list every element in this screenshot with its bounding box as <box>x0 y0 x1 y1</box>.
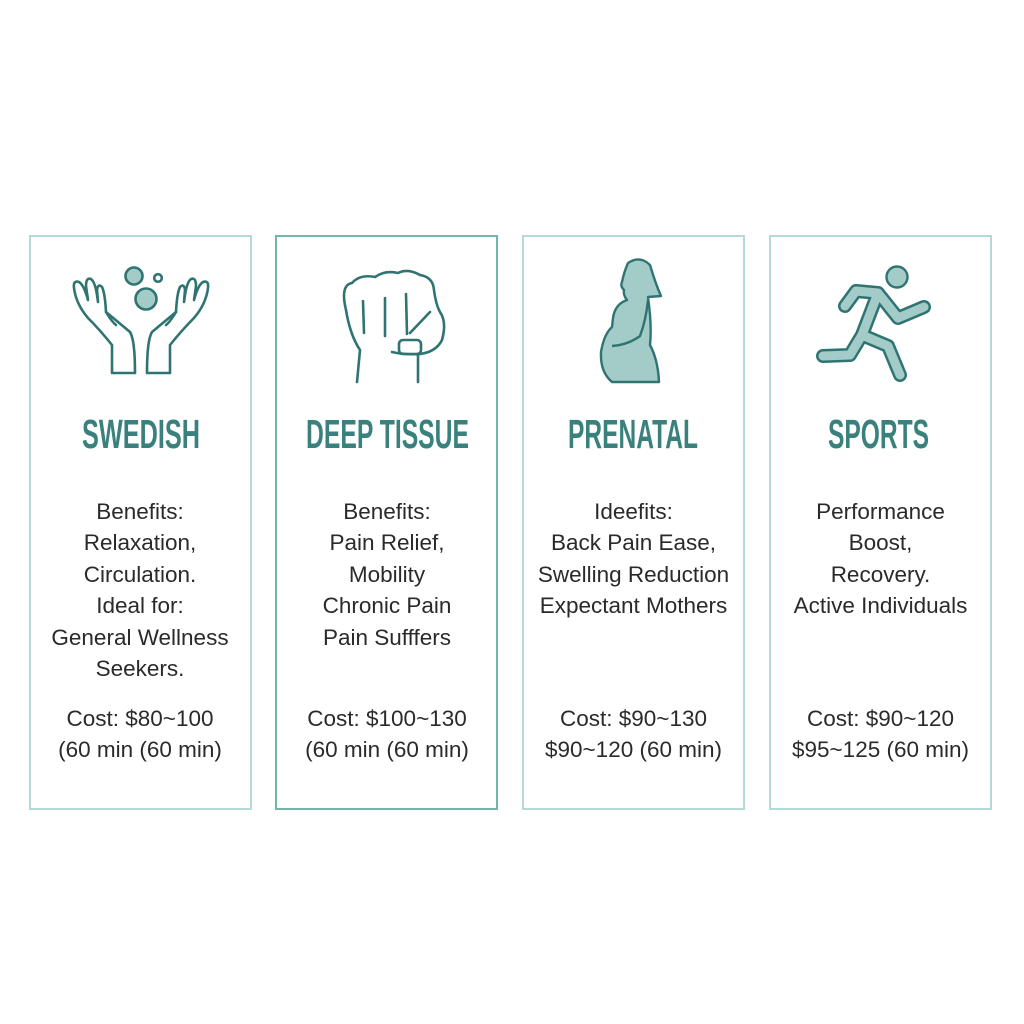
text: prenatal cost: Cost: $90~130 <box>560 706 707 731</box>
text: sports cost <box>792 706 969 762</box>
title: prenatal: PRENATAL <box>568 411 698 457</box>
text: sports benefits: Recovery. <box>831 562 930 587</box>
text: sports benefits: Active Individuals <box>794 593 967 618</box>
text: swedish cost: Cost: $80~100 <box>66 706 214 731</box>
text: prenatal benefits: Swelling Reduction <box>538 562 729 587</box>
text: deep tissue cost <box>305 706 469 762</box>
panel: prenatal <box>522 235 745 810</box>
text: swedish benefits: Benefits: <box>96 499 184 524</box>
icon: runner <box>823 266 924 375</box>
icon: fist <box>344 271 444 382</box>
title: sports: SPORTS <box>828 411 929 457</box>
text: prenatal benefits: Expectant Mothers <box>540 593 727 618</box>
text: deep tissue benefits: Mobility <box>349 562 425 587</box>
text: swedish cost <box>58 706 222 762</box>
text: sports cost: $95~125 (60 min) <box>792 737 969 762</box>
text: sports benefits: Boost, <box>849 530 912 555</box>
panel: sports <box>769 235 992 810</box>
panel: swedish <box>29 235 252 810</box>
icon: pregnant woman <box>601 259 661 382</box>
title: deep tissue: DEEP TISSUE <box>306 411 469 457</box>
text: swedish benefits <box>51 499 229 681</box>
text: sports benefits: Performance <box>816 499 945 524</box>
text: swedish benefits: General Wellness <box>51 625 229 650</box>
text: sports cost: Cost: $90~120 <box>807 706 954 731</box>
text: swedish benefits: Ideal for: <box>96 593 184 618</box>
text: swedish cost: (60 min (60 min) <box>58 737 222 762</box>
text: deep tissue benefits: Benefits: <box>343 499 431 524</box>
text: deep tissue benefits: Pain Sufffers <box>323 625 451 650</box>
icon: hands with bubbles <box>74 268 208 373</box>
text: prenatal benefits: Back Pain Ease, <box>551 530 716 555</box>
text: swedish benefits: Seekers. <box>96 656 184 681</box>
text: prenatal cost <box>545 706 722 762</box>
text: deep tissue cost: Cost: $100~130 <box>307 706 467 731</box>
text: swedish benefits: Relaxation, <box>84 530 196 555</box>
text: deep tissue benefits: Pain Relief, <box>329 530 445 555</box>
text: sports benefits <box>794 499 967 618</box>
text: deep tissue cost: (60 min (60 min) <box>305 737 469 762</box>
panel: deep tissue <box>275 235 498 810</box>
text: deep tissue benefits: Chronic Pain <box>323 593 451 618</box>
title: swedish: SWEDISH <box>82 411 200 457</box>
text: swedish benefits: Circulation. <box>84 562 196 587</box>
text: prenatal benefits <box>538 499 729 618</box>
text: deep tissue benefits <box>323 499 451 650</box>
text: prenatal cost: $90~120 (60 min) <box>545 737 722 762</box>
text: prenatal benefits: Ideefits: <box>594 499 673 524</box>
